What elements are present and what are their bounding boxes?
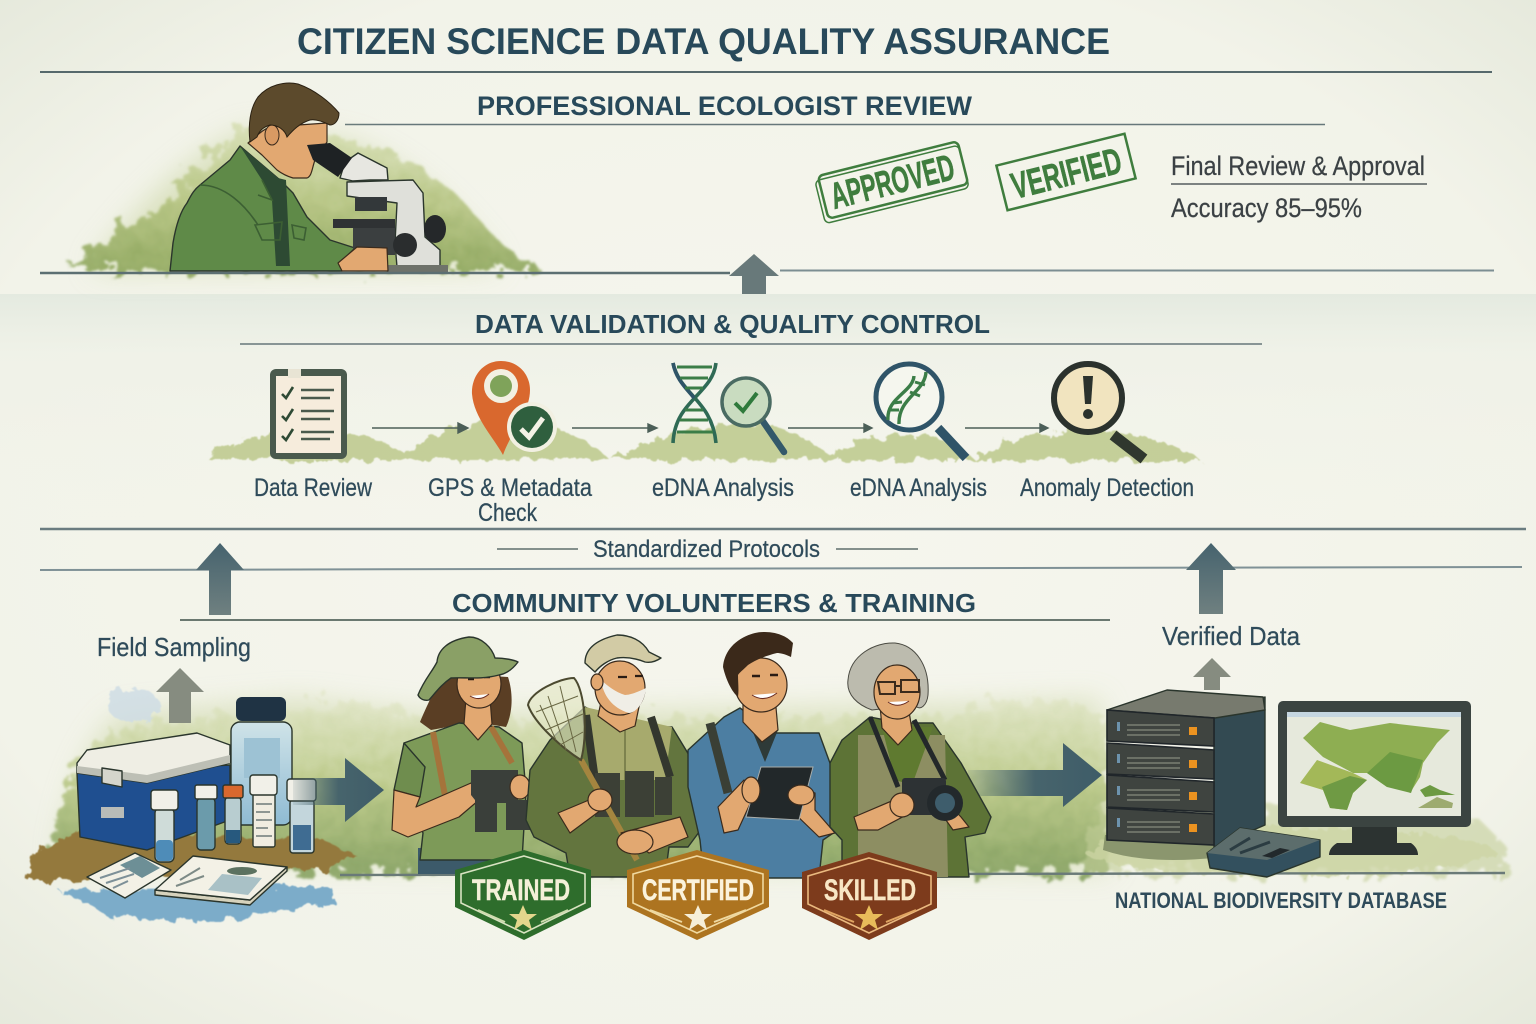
left arm — [854, 800, 910, 830]
final review note: Accuracy 85–95% — [1171, 193, 1362, 223]
right hand — [617, 830, 653, 854]
left hand — [890, 793, 914, 817]
microscope back lens — [424, 215, 446, 243]
arrow: small field sampling arrow — [156, 668, 204, 723]
volunteer: woman with binoculars — [392, 637, 530, 874]
sample tube 1 — [151, 790, 178, 862]
badge: skilled — [802, 852, 937, 940]
map: australia — [1418, 797, 1453, 808]
net — [528, 678, 585, 760]
heading: community volunteers: COMMUNITY VOLUNTEERS & TRAINING — [452, 588, 976, 618]
map: south asia — [1367, 752, 1423, 793]
neck — [880, 705, 912, 745]
ecologist hand — [338, 247, 388, 271]
jacket — [526, 707, 708, 877]
face — [595, 661, 645, 715]
ear — [591, 674, 603, 690]
microscope head — [340, 153, 388, 181]
badge: certified: CERTIFIED — [642, 874, 754, 907]
microscope base — [387, 265, 448, 272]
hat — [418, 637, 518, 700]
arm — [392, 783, 479, 837]
pale cloud — [107, 688, 159, 722]
heading: data validation: DATA VALIDATION & QUALITY CONTROL — [475, 309, 990, 339]
microscope focus knob — [393, 233, 417, 257]
panel: professional ecologist review — [72, 83, 1427, 272]
ecologist ear — [265, 125, 279, 145]
arrow: validation to review — [729, 254, 779, 294]
beard — [601, 680, 646, 713]
arrow: small verified data arrow — [1193, 658, 1231, 690]
heading: professional ecologist review: PROFESSIONAL ECOLOGIST REVIEW — [477, 91, 973, 121]
cooler box — [77, 733, 230, 850]
labels: Anomaly Detection — [1020, 474, 1194, 502]
badge: trained: TRAINED — [472, 874, 570, 907]
title: CITIZEN SCIENCE DATA QUALITY ASSURANCE — [297, 21, 1110, 62]
collar buttons — [624, 727, 626, 780]
foliage halo band — [60, 700, 1110, 870]
data device — [1207, 828, 1320, 877]
left arm — [718, 780, 755, 833]
microscope stage — [333, 219, 395, 228]
badge: trained — [455, 850, 591, 940]
badge: certified — [627, 850, 769, 940]
volunteer: young man with tablet — [688, 632, 846, 878]
foliage behind ecologist — [72, 125, 540, 270]
icon: magnifier over DNA — [876, 364, 966, 458]
hair — [420, 673, 512, 730]
smile — [470, 694, 489, 699]
straps — [433, 727, 512, 817]
large sample jar — [231, 697, 292, 825]
left forearm — [558, 800, 601, 833]
labels: eDNA Analysis — [850, 474, 987, 502]
shirt — [404, 723, 526, 860]
eyes — [752, 675, 778, 676]
panel: data validation and quality control — [208, 309, 1262, 527]
labels: eDNA Analysis — [652, 474, 794, 502]
stamp: approved — [814, 141, 969, 224]
server stack — [1103, 690, 1270, 860]
neck — [464, 698, 492, 740]
arrow: data to validation right — [1186, 543, 1236, 614]
labels: Check — [478, 499, 537, 527]
foliage halo behind ecologist — [90, 130, 500, 270]
straps — [870, 717, 945, 787]
microscope condenser — [353, 228, 395, 255]
jacket folds and pockets — [200, 180, 306, 240]
map: south central africa — [1322, 776, 1367, 810]
neck — [598, 702, 640, 732]
hair — [723, 632, 793, 697]
arrow: volunteers to database — [968, 743, 1102, 807]
cap — [585, 635, 661, 672]
face — [874, 665, 920, 719]
shirt — [585, 707, 672, 780]
stamp: verified: VERIFIED — [1007, 140, 1126, 207]
microscope arm and base — [347, 180, 440, 267]
vest — [858, 735, 948, 877]
labels: GPS & Metadata — [428, 474, 592, 502]
illustration: biodiversity database — [1103, 690, 1471, 877]
eyes — [618, 676, 643, 677]
stamp: verified — [996, 134, 1136, 210]
chest binoculars — [595, 771, 672, 817]
sample tube 2 — [195, 785, 217, 850]
inner shirt and tie — [240, 146, 290, 266]
water puddle — [58, 886, 334, 922]
neck — [743, 696, 778, 742]
binoculars — [471, 770, 530, 832]
icon: anomaly magnifier — [1054, 364, 1144, 459]
straps — [586, 715, 670, 780]
badge: skilled: SKILLED — [824, 874, 916, 907]
final review note — [1171, 151, 1427, 223]
labels — [254, 474, 1194, 527]
baseline — [340, 873, 1505, 875]
eyes — [468, 677, 490, 679]
standardized protocols note: Standardized Protocols — [593, 536, 820, 563]
foliage band — [52, 700, 1110, 872]
field notebook — [155, 856, 287, 905]
right arm — [941, 800, 969, 830]
arrow: volunteers to validation left — [196, 543, 244, 615]
microscope objectives — [355, 197, 387, 211]
right forearm — [621, 817, 688, 853]
icon: clipboard checklist — [270, 369, 347, 459]
hair — [848, 643, 928, 710]
ecologist hair — [249, 83, 339, 142]
shirt — [688, 708, 846, 878]
jacket — [830, 717, 991, 877]
label: field sampling: Field Sampling — [97, 632, 251, 662]
tee — [752, 730, 778, 762]
stamp: approved: APPROVED — [826, 147, 958, 217]
inner shirt — [882, 727, 933, 785]
map: eurasia — [1303, 722, 1450, 793]
final review note: Final Review & Approval — [1171, 151, 1425, 181]
foliage right of database — [1085, 800, 1508, 872]
right hand — [788, 785, 814, 805]
smile — [888, 701, 909, 705]
smile — [752, 693, 777, 699]
panel: community volunteers and training — [26, 588, 1508, 940]
label: verified data: Verified Data — [1162, 621, 1300, 651]
ecologist face — [248, 123, 327, 178]
sample tube 3 — [223, 785, 243, 844]
foliage strip under icons — [208, 420, 1200, 460]
label: national biodiversity database: NATIONAL BIODIVERSITY DATABASE — [1115, 888, 1447, 913]
monitor — [1278, 701, 1471, 855]
field card — [87, 853, 171, 898]
hand — [510, 775, 530, 799]
illustration: field sampling kit — [77, 697, 316, 905]
volunteer: older man with net — [526, 635, 708, 877]
microscope eyepiece — [307, 143, 352, 177]
camera — [902, 778, 963, 821]
icon: DNA with magnifier — [673, 363, 784, 452]
sample tube 5 — [287, 779, 316, 853]
left hand — [588, 789, 612, 811]
ecologist jacket — [170, 146, 355, 271]
ground under database — [1085, 828, 1495, 876]
soil patch — [26, 832, 358, 880]
net handle — [581, 760, 637, 860]
tablet — [746, 767, 813, 820]
icon: GPS pin with check — [472, 361, 557, 455]
flow arrows — [372, 423, 1048, 433]
validation band background — [0, 294, 1536, 530]
left hand — [742, 777, 760, 803]
labels: Data Review — [254, 474, 373, 502]
map: islands — [1420, 785, 1455, 797]
right arm — [787, 787, 835, 837]
face — [457, 660, 501, 708]
face — [735, 658, 787, 712]
volunteer: older woman with camera — [830, 643, 991, 877]
backpack strap — [710, 723, 728, 793]
pants — [418, 848, 500, 874]
sample tube 4 — [250, 775, 277, 847]
map: africa — [1300, 760, 1367, 810]
sleeve — [394, 743, 425, 797]
illustration: ecologist at microscope — [170, 83, 448, 272]
arrow: kit to volunteers — [293, 758, 384, 822]
glasses — [878, 680, 919, 694]
